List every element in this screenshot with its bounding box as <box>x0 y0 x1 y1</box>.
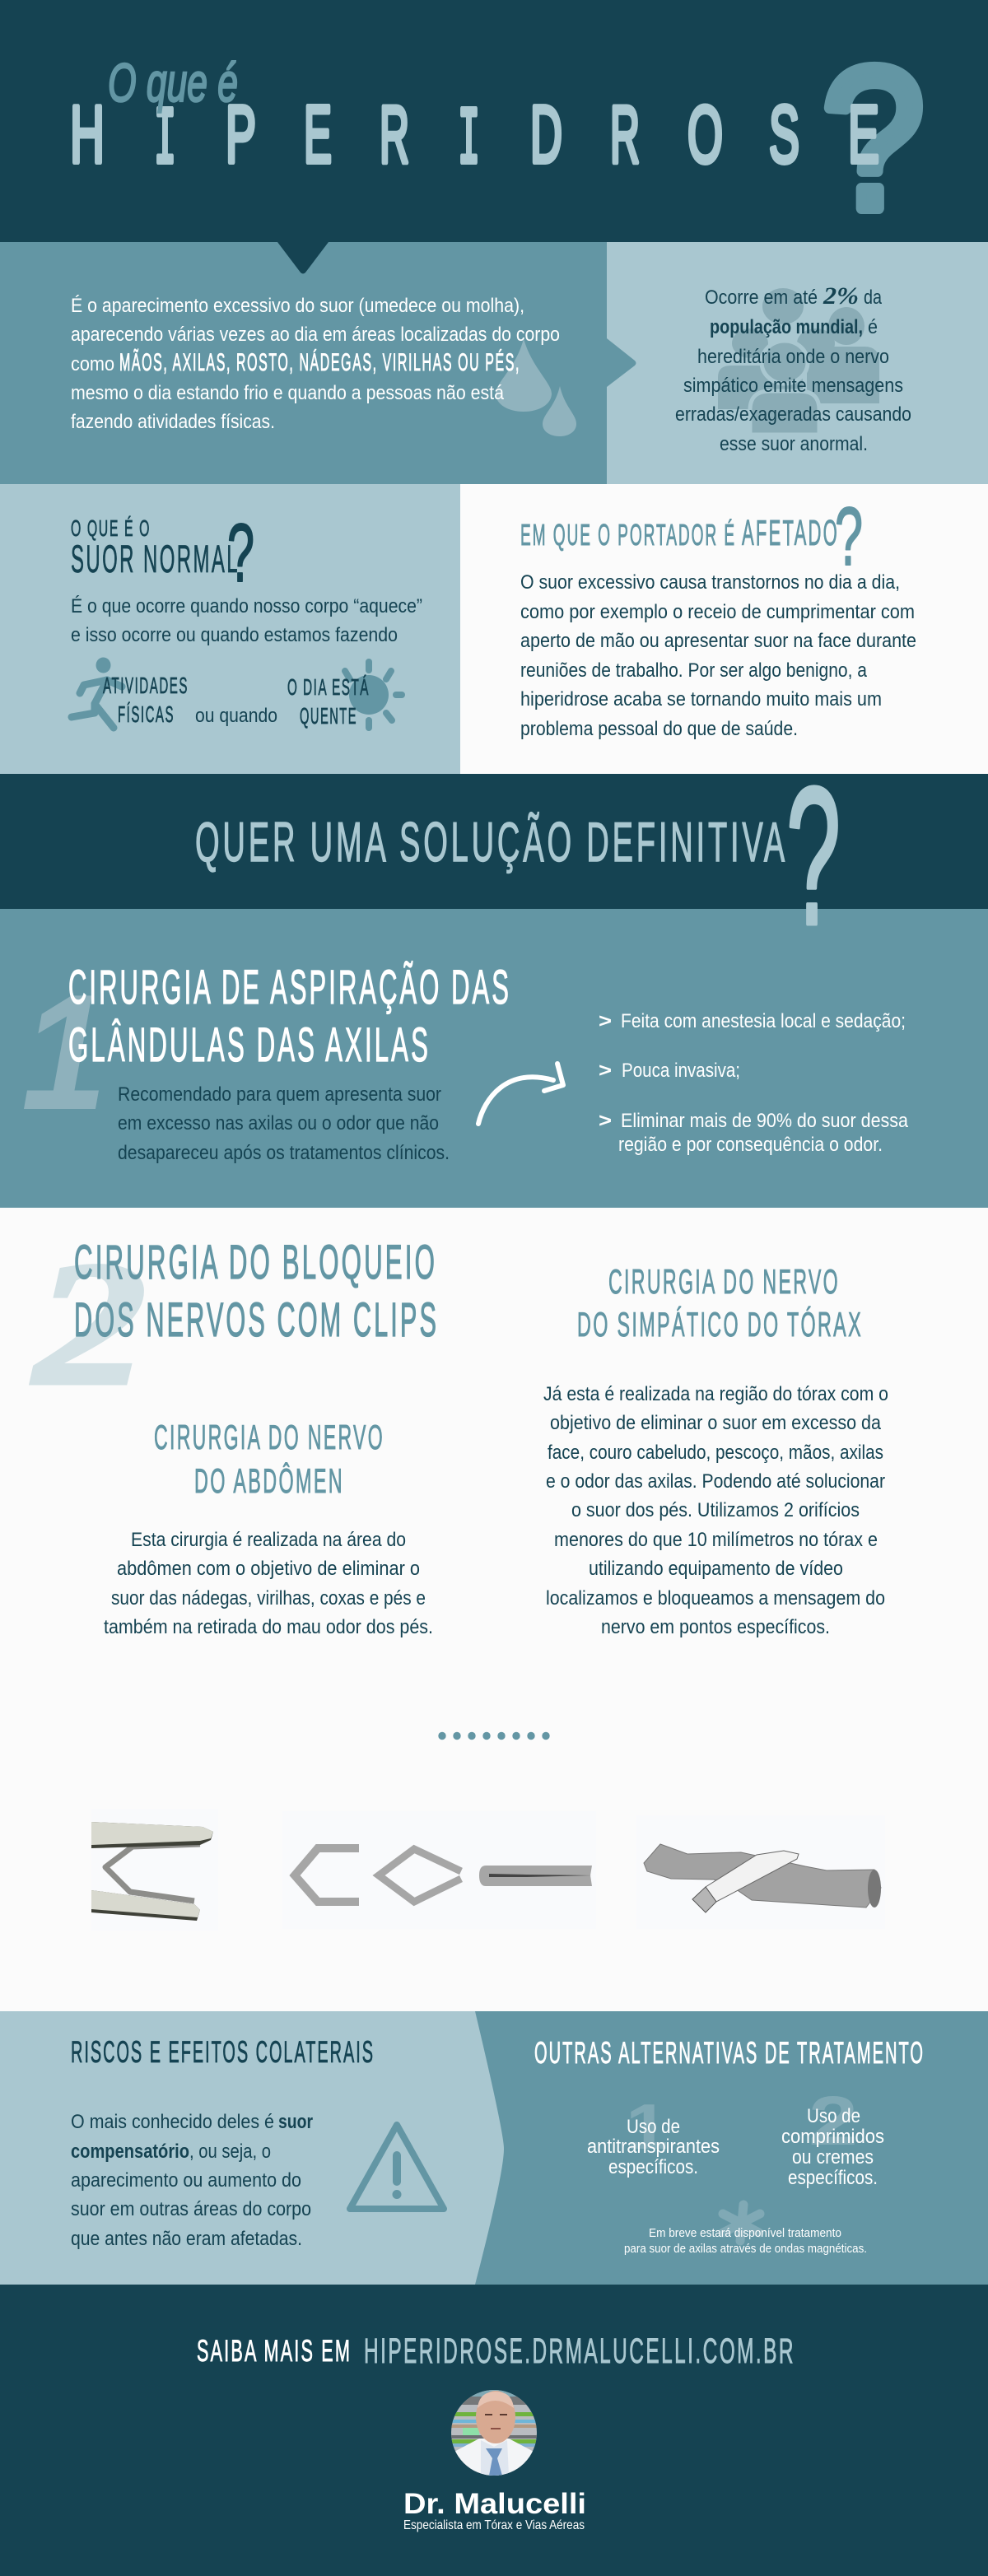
alternative 2: Uso de <box>807 2105 860 2127</box>
alternative 1 <box>587 2116 720 2178</box>
asterisk <box>723 2205 760 2241</box>
normal sweat text <box>71 595 422 646</box>
prevalence text: população mundial, <box>710 316 863 338</box>
heading: suor normal: SUOR NORMAL <box>71 537 240 580</box>
risks text: O mais conhecido deles é <box>71 2111 274 2133</box>
heading: suor normal <box>71 507 254 599</box>
activity labels: QUENTE <box>300 703 357 729</box>
surgery 1 bullets <box>599 1010 909 1156</box>
thorax nerve text: localizamos e bloqueamos a mensagem do <box>546 1587 885 1609</box>
panel: alternatives <box>475 2011 988 2285</box>
thorax nerve text: objetivo de eliminar o suor em excesso da <box>550 1412 882 1434</box>
panel: surgery 1 <box>21 961 909 1164</box>
alternative 1: antitranspirantes <box>587 2136 720 2158</box>
affected text: problema pessoal do que de saúde. <box>520 718 798 740</box>
surgery 1 description <box>118 1083 450 1164</box>
surgery 1 description: Recomendado para quem apresenta suor <box>118 1083 441 1106</box>
title: HIPERIDROSE: R <box>610 89 640 179</box>
note <box>624 2226 867 2256</box>
note: Em breve estará disponível tratamento <box>649 2226 841 2240</box>
image: clip on nerve <box>636 1815 885 1929</box>
affected text: aperto de mão ou apresentar suor na face durante <box>520 630 916 652</box>
icon: group of people <box>718 288 879 435</box>
affected text: O suor excessivo causa transtornos no dia a dia, <box>520 571 900 594</box>
surgery 1 bullets: > <box>599 1060 612 1082</box>
title: HIPERIDROSE: E <box>304 89 332 179</box>
abdomen nerve text: abdômen com o objetivo de eliminar o <box>117 1558 420 1580</box>
prevalence text: erradas/exageradas causando <box>675 403 911 426</box>
prevalence text <box>675 282 911 455</box>
risks text: , ou seja, o <box>189 2140 271 2163</box>
title: HIPERIDROSE: E <box>848 89 879 179</box>
icon: sun <box>345 662 402 728</box>
abdomen nerve text: Esta cirurgia é realizada na área do <box>131 1529 406 1551</box>
title: HIPERIDROSE: H <box>70 89 105 179</box>
activity labels: ou quando <box>195 705 277 727</box>
title: HIPERIDROSE: I <box>458 95 480 187</box>
dotted separator <box>438 1732 550 1740</box>
panel: definition <box>0 242 607 484</box>
title: HIPERIDROSE: P <box>226 89 256 179</box>
risks text: que antes não eram afetadas. <box>71 2228 302 2250</box>
prevalence text: esse suor anormal. <box>720 433 868 455</box>
heading: thorax nerve <box>577 1262 863 1344</box>
thorax nerve text <box>543 1383 888 1638</box>
definition text: É o aparecimento excessivo do suor (umedece ou molha), <box>71 295 524 317</box>
thorax nerve text: Já esta é realizada na região do tórax com o <box>543 1383 888 1405</box>
surgery 1 description: em excesso nas axilas ou o odor que não <box>118 1112 439 1134</box>
abdomen nerve text: também na retirada do mau odor dos pés. <box>104 1616 433 1638</box>
heading: clips surgery <box>74 1236 439 1347</box>
abdomen nerve text <box>104 1529 433 1638</box>
alternative 2 <box>781 2105 884 2189</box>
heading: abdomen nerve: CIRURGIA DO NERVO <box>154 1418 384 1456</box>
title: HIPERIDROSE: S <box>769 89 799 179</box>
title: HIPERIDROSE: I <box>154 95 176 187</box>
heading: clips surgery: CIRURGIA DO BLOQUEIO <box>74 1236 437 1289</box>
panel: solution banner <box>0 748 988 966</box>
activity labels: O DIA ESTÁ <box>287 674 370 700</box>
number 2: 2 <box>31 1225 147 1422</box>
prevalence text: Ocorre em até <box>705 286 818 309</box>
affected text <box>520 571 916 740</box>
thorax nerve text: o suor dos pés. Utilizamos 2 orifícios <box>571 1499 860 1521</box>
thorax nerve text: e o odor das axilas. Podendo até solucionar <box>546 1470 885 1493</box>
surgery 1 bullets: Eliminar mais de 90% do suor dessa <box>621 1110 909 1132</box>
heading: aspiration surgery: CIRURGIA DE ASPIRAÇÃO DAS <box>68 961 511 1014</box>
definition text: MÃOS, AXILAS, ROSTO, NÁDEGAS, VIRILHAS OU PÉS, <box>119 348 520 376</box>
definition text <box>71 295 560 433</box>
heading: affected: ? <box>835 491 863 583</box>
prevalence text: simpático emite mensagens <box>683 375 903 397</box>
activity labels <box>103 673 370 729</box>
call to action: SAIBA MAIS EM <box>197 2334 352 2368</box>
heading: suor normal: O QUE É O <box>71 515 151 541</box>
icon: big question mark: ? <box>822 26 925 251</box>
doctor specialty: Especialista em Tórax e Vias Aéreas <box>403 2518 585 2532</box>
abdomen nerve text: suor das nádegas, virilhas, coxas e pés e <box>111 1587 426 1609</box>
definition text: como <box>71 353 114 375</box>
panel: solution banner: ? <box>786 748 841 966</box>
icon: runner <box>72 657 122 728</box>
icon: warning triangle <box>350 2125 444 2209</box>
title: HIPERIDROSE <box>70 89 879 187</box>
prevalence text: 2% <box>823 282 859 310</box>
alternative 1: Uso de <box>627 2116 680 2138</box>
icon: pointer right <box>607 338 636 387</box>
title: HIPERIDROSE: D <box>530 89 562 179</box>
risks text: aparecimento ou aumento do <box>71 2169 301 2192</box>
thorax nerve text: face, couro cabeludo, pescoço, mãos, axilas <box>548 1442 883 1464</box>
image: clip applicator <box>91 1809 218 1931</box>
number 2: 2 <box>809 2082 858 2159</box>
risks text: suor <box>278 2111 313 2133</box>
panel: normal sweat <box>0 484 460 774</box>
surgery 1 bullets: região e por consequência o odor. <box>618 1134 883 1156</box>
icon: sweat drops <box>496 338 576 436</box>
definition text: mesmo o dia estando frio e quando a pessoas não está <box>71 382 505 404</box>
heading: clips surgery: DOS NERVOS COM CLIPS <box>74 1293 439 1347</box>
risks text <box>71 2111 313 2250</box>
affected text: reuniões de trabalho. Por ser algo benigno, a <box>520 659 868 682</box>
prevalence text: hereditária onde o nervo <box>697 346 889 368</box>
heading: aspiration surgery: GLÂNDULAS DAS AXILAS <box>68 1018 431 1072</box>
doctor name: Dr. Malucelli <box>403 2488 586 2520</box>
prevalence text: da <box>864 286 883 309</box>
number 1: 1 <box>21 961 107 1144</box>
surgery 1 bullets: > <box>599 1010 612 1032</box>
prevalence text: é <box>868 316 878 338</box>
surgery 1 bullets: > <box>599 1110 612 1132</box>
heading: affected <box>520 491 863 583</box>
surgery 1 bullets: Pouca invasiva; <box>622 1060 740 1082</box>
alternative 1: específicos. <box>608 2156 698 2178</box>
alternative 2: comprimidos <box>781 2126 884 2148</box>
call to action <box>197 2331 795 2371</box>
image: clips <box>282 1811 596 1929</box>
number 1: 1 <box>626 2090 669 2163</box>
affected text: como por exemplo o receio de cumprimentar com <box>520 601 915 623</box>
heading: abdomen nerve: DO ABDÔMEN <box>194 1461 344 1500</box>
panel: header <box>0 0 988 251</box>
panel: footer <box>0 2285 988 2576</box>
panel: surgery 1 background <box>0 909 988 1208</box>
subtitle: O que é: O que é <box>108 52 238 113</box>
panel: affected <box>460 484 988 774</box>
definition text: aparecendo várias vezes ao dia em áreas localizadas do corpo <box>71 324 560 346</box>
surgery 1 bullets: Feita com anestesia local e sedação; <box>621 1010 906 1032</box>
heading: affected: AFETADO <box>742 513 839 553</box>
note: para suor de axilas através de ondas magnéticas. <box>624 2242 867 2256</box>
risks text: compensatório <box>71 2140 189 2163</box>
thorax nerve text: utilizando equipamento de vídeo <box>589 1558 843 1580</box>
surgery 1 description: desapareceu após os tratamentos clínicos. <box>118 1142 450 1164</box>
definition text: fazendo atividades físicas. <box>71 411 275 433</box>
alternative 2: específicos. <box>788 2167 878 2189</box>
panel: prevalence <box>607 242 988 484</box>
normal sweat text: É o que ocorre quando nosso corpo “aquece” <box>71 595 422 617</box>
heading: suor normal: ? <box>227 507 254 599</box>
thorax nerve text: menores do que 10 milímetros no tórax e <box>554 1529 878 1551</box>
title: HIPERIDROSE: O <box>687 89 723 179</box>
affected text: hiperidrose acaba se tornando muito mais um <box>520 688 882 710</box>
activity labels: FÍSICAS <box>118 701 175 727</box>
heading: affected: EM QUE O PORTADOR É <box>520 518 736 552</box>
icon: pointer down <box>277 242 329 273</box>
thorax nerve text: nervo em pontos específicos. <box>601 1616 830 1638</box>
panel: surgery 2 <box>0 1208 988 2011</box>
heading: risks: RISCOS E EFEITOS COLATERAIS <box>71 2035 375 2069</box>
alternative 2: ou cremes <box>792 2146 874 2168</box>
heading: abdomen nerve <box>154 1418 384 1500</box>
arrow <box>478 1064 563 1124</box>
panel: risks <box>0 2011 510 2285</box>
doctor portrait <box>451 2390 537 2476</box>
risks text: suor em outras áreas do corpo <box>71 2198 311 2220</box>
title: HIPERIDROSE: R <box>380 89 409 179</box>
activity labels: ATIVIDADES <box>103 673 189 698</box>
normal sweat text: e isso ocorre ou quando estamos fazendo <box>71 624 398 646</box>
heading: aspiration surgery <box>68 961 511 1072</box>
